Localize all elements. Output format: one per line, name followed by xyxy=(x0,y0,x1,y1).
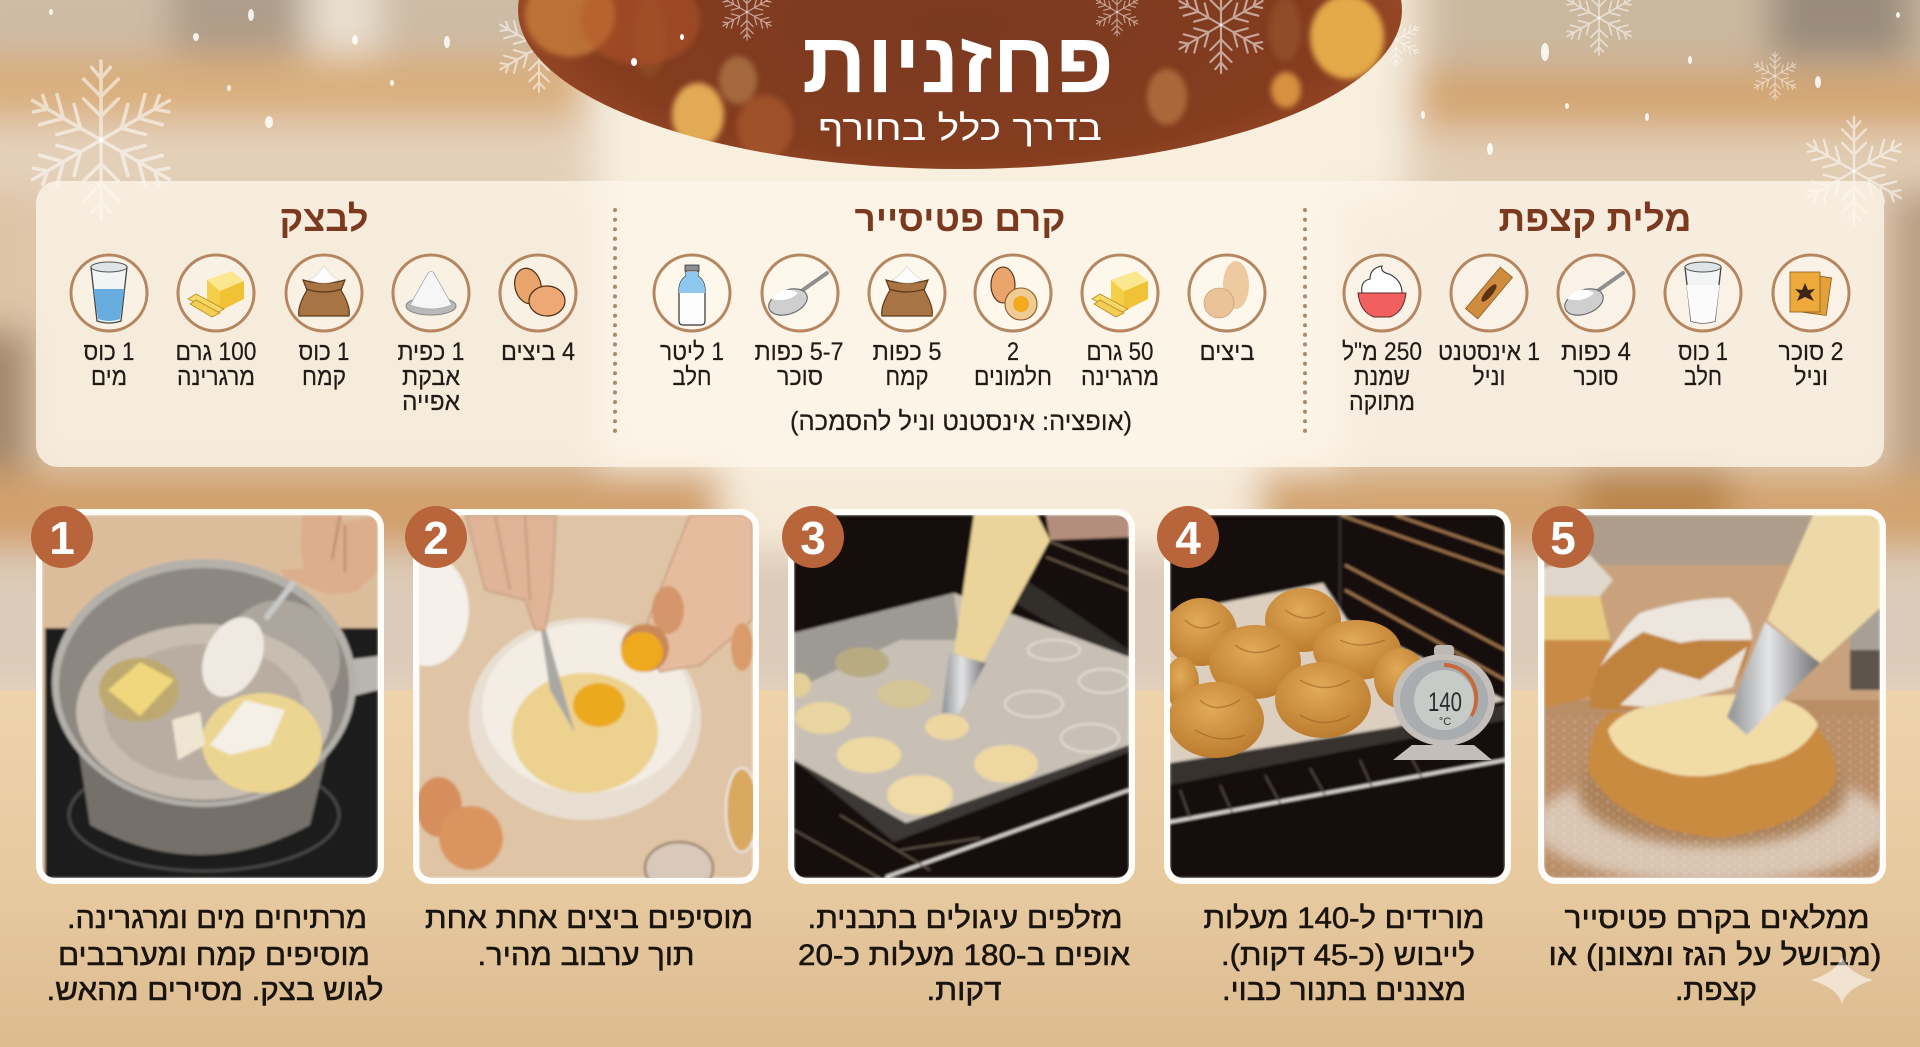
ingredient: 1 כוס מים xyxy=(71,255,147,391)
ingredient: 4 ביצים: 4 ביצים xyxy=(501,338,575,366)
caption: step 3: מזלפים עיגולים בתבנית. xyxy=(808,902,1122,935)
ingredient: 2 סוכר וניל: וניל xyxy=(1794,363,1828,391)
title text: פחזניות xyxy=(802,15,1114,111)
ingredient: 1 כוס קמח: 1 כוס xyxy=(298,338,350,366)
ingredient: ביצים xyxy=(1189,255,1265,366)
caption: step 1 xyxy=(46,902,384,1007)
ingredient: 1 כפית אבקת אפייה: 1 כפית xyxy=(398,338,464,366)
photo: filling a puff with cream xyxy=(1534,515,1890,883)
ingredient: 1 כפית אבקת אפייה xyxy=(393,255,469,416)
step number badges xyxy=(31,506,1594,568)
ingredient: 5 כפות קמח xyxy=(869,255,945,391)
icon: oven thermometer: 140 xyxy=(1428,687,1462,717)
ingredient: 1 ליטר חלב: 1 ליטר xyxy=(660,338,724,366)
caption: step 3 xyxy=(798,902,1130,1007)
caption: step 2: תוך ערבוב מהיר. xyxy=(478,939,694,972)
caption: step 5 xyxy=(1548,902,1882,1007)
ingredient: 100 גרם מרגרינה: מרגרינה xyxy=(177,363,255,391)
ingredient: 1 כוס קמח: קמח xyxy=(302,363,346,391)
ingredient: 250 מ"ל שמנת מתוקה: שמנת xyxy=(1354,363,1410,391)
ingredient: 5-7 כפות סוכר xyxy=(754,255,844,391)
heading: מלית קצפת: מלית קצפת xyxy=(1498,198,1692,239)
step 4: card xyxy=(1164,509,1511,884)
ingredient: 100 גרם מרגרינה xyxy=(176,255,256,391)
step 3: card xyxy=(787,509,1135,884)
ingredient: 100 גרם מרגרינה: 100 גרם xyxy=(176,338,256,366)
caption: step 1: לגוש בצק. מסירים מהאש. xyxy=(46,974,384,1007)
step number badges: 2 xyxy=(423,512,449,564)
ingredient: 1 כוס קמח xyxy=(286,255,362,391)
ingredient: 2 סוכר וניל: 2 סוכר xyxy=(1778,338,1844,366)
ingredient: 5 כפות קמח: קמח xyxy=(886,363,928,391)
ingredient: 5 כפות קמח: 5 כפות xyxy=(872,338,942,366)
ingredient: 250 מ"ל שמנת מתוקה: מתוקה xyxy=(1349,388,1415,416)
ingredient: 1 כוס חלב xyxy=(1665,255,1741,391)
caption: step 4: לייבוש (כ-45 דקות). xyxy=(1221,939,1475,972)
panel: ingredients xyxy=(36,181,1884,467)
ingredient: 2 חלמונים: 2 xyxy=(1007,338,1019,366)
ingredient: 50 גרם מרגרינה: מרגרינה xyxy=(1081,363,1159,391)
caption: step 3: דקות. xyxy=(926,974,1002,1007)
photo: baked puffs and oven thermometer xyxy=(1165,515,1505,878)
step 5: card xyxy=(1534,509,1890,884)
step number badges: 4 xyxy=(1175,512,1201,564)
ingredient: 250 מ"ל שמנת מתוקה xyxy=(1342,255,1422,416)
ingredient: 1 אינסטנט וניל: וניל xyxy=(1472,363,1506,391)
step number badges: 5 xyxy=(1550,512,1576,564)
ingredient: 4 כפות סוכר: סוכר xyxy=(1574,363,1618,391)
caption: step 4 xyxy=(1204,902,1484,1007)
ingredient: ביצים: ביצים xyxy=(1200,338,1255,366)
photo: pot on stove xyxy=(42,515,378,878)
subtitle: בדרך כלל בחורף xyxy=(818,109,1102,148)
caption: step 1: מרתיחים מים ומרגרינה. xyxy=(67,902,367,935)
ingredient: 4 כפות סוכר xyxy=(1558,255,1634,391)
step number badges: 1 xyxy=(49,512,75,564)
ingredient: 2 סוכר וניל xyxy=(1773,255,1849,391)
icon: oven thermometer xyxy=(1393,645,1495,760)
ingredient: 1 כוס מים: 1 כוס xyxy=(84,338,134,366)
ingredient: 2 חלמונים xyxy=(974,255,1052,391)
ingredient: 1 כוס חלב: 1 כוס xyxy=(1678,338,1728,366)
caption: step 1: מוסיפים קמח ומערבבים xyxy=(58,939,370,972)
ingredient: 4 כפות סוכר: 4 כפות xyxy=(1561,338,1631,366)
ingredient: 50 גרם מרגרינה xyxy=(1081,255,1159,391)
heading: קרם פטיסייר: קרם פטיסייר xyxy=(854,198,1066,239)
step 1: card xyxy=(36,509,384,884)
divider dots xyxy=(615,210,1305,438)
step 2: card xyxy=(385,509,759,894)
heading: לבצק: לבצק xyxy=(280,198,368,239)
icon: watermark sparkle xyxy=(1811,955,1873,1004)
caption: step 4: מורידים ל-140 מעלות xyxy=(1204,902,1484,935)
caption: step 5: (מבושל על הגז ומצונן) או xyxy=(1548,939,1882,972)
note: optional instant vanilla: (אופציה: אינסטנט וניל להסמכה) xyxy=(790,406,1132,436)
ingredient: 2 חלמונים: חלמונים xyxy=(974,363,1052,391)
caption: step 2 xyxy=(425,902,753,972)
ingredient: 5-7 כפות סוכר: 5-7 כפות xyxy=(754,338,844,366)
photo: piping dough on a tray in the oven xyxy=(787,515,1129,878)
step number badges: 3 xyxy=(800,512,826,564)
ingredient: 50 גרם מרגרינה: 50 גרם xyxy=(1086,338,1154,366)
ingredient: 1 כפית אבקת אפייה: אבקת xyxy=(402,363,460,391)
ingredient: 4 ביצים xyxy=(500,255,576,366)
caption: step 4: מצננים בתנור כבוי. xyxy=(1222,974,1466,1007)
ingredient: 1 אינסטנט וניל: 1 אינסטנט xyxy=(1438,338,1540,366)
ingredient: 5-7 כפות סוכר: סוכר xyxy=(777,363,823,391)
title banner xyxy=(518,0,1402,169)
ingredient: 1 כוס מים: מים xyxy=(91,363,127,391)
snowflakes and snow dots xyxy=(24,0,1907,225)
ingredient: 1 כוס חלב: חלב xyxy=(1684,363,1722,391)
icon: oven thermometer: °C xyxy=(1439,716,1451,728)
ingredient: 1 כפית אבקת אפייה: אפייה xyxy=(402,388,460,416)
ingredient: 1 אינסטנט וניל xyxy=(1438,255,1540,391)
ingredient: 1 ליטר חלב xyxy=(654,255,730,391)
ingredient: 1 ליטר חלב: חלב xyxy=(672,363,712,391)
photo: eggs into dough xyxy=(419,515,753,878)
caption: step 5: ממלאים בקרם פטיסייר xyxy=(1564,902,1870,935)
caption: step 3: אופים ב-180 מעלות כ-20 xyxy=(798,939,1130,972)
ingredient: 250 מ"ל שמנת מתוקה: 250 מ"ל xyxy=(1342,338,1422,366)
caption: step 2: מוסיפים ביצים אחת אחת xyxy=(425,902,753,935)
caption: step 5: קצפת. xyxy=(1675,974,1757,1007)
